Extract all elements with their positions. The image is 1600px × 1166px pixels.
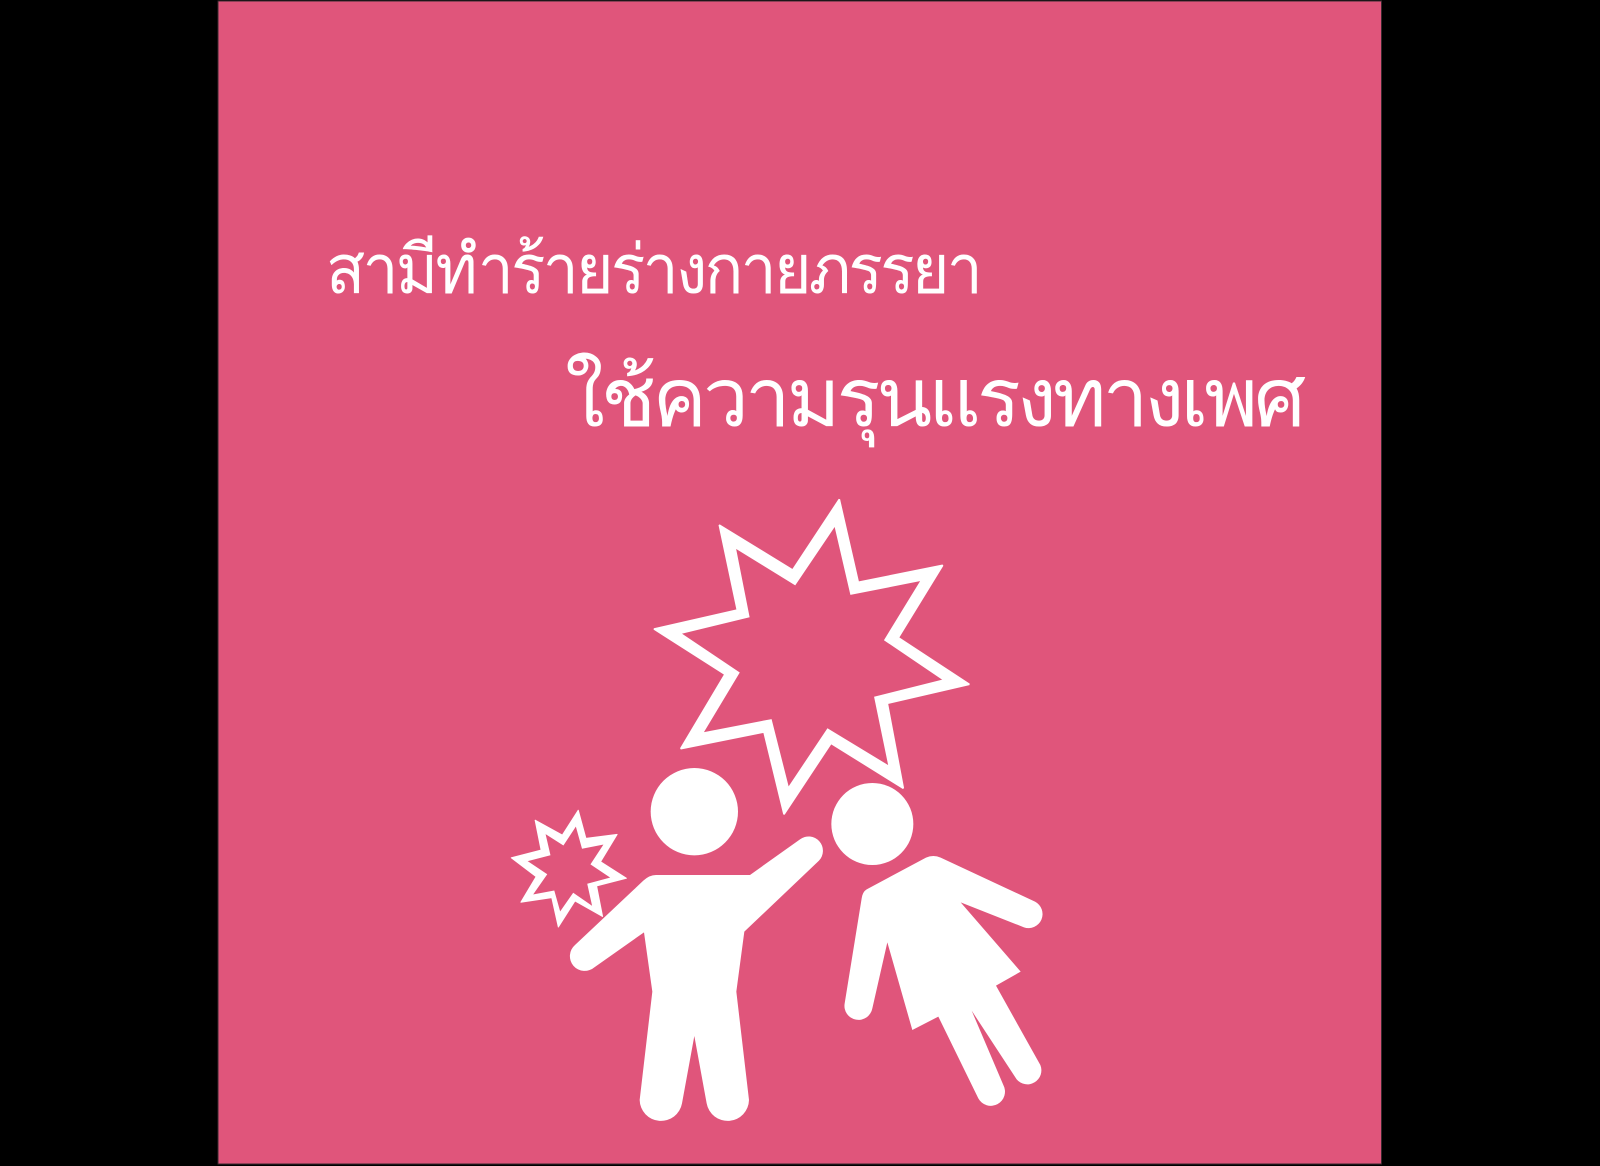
icon: large burst star	[654, 499, 969, 814]
woman head	[831, 783, 913, 865]
icon: small burst star	[511, 810, 627, 927]
icon: woman figure falling	[831, 783, 1043, 1106]
woman body	[844, 856, 1043, 1106]
heading: second line: ใช้ความรุนแรงทางเพศ	[565, 353, 1306, 448]
man head	[651, 768, 738, 855]
panel: pink background	[218, 1, 1382, 1164]
icon: man figure with raised arm	[570, 768, 823, 1121]
man body	[570, 836, 823, 1121]
heading: first line: สามีทำร้ายร่างกายภรรยา	[326, 232, 980, 308]
